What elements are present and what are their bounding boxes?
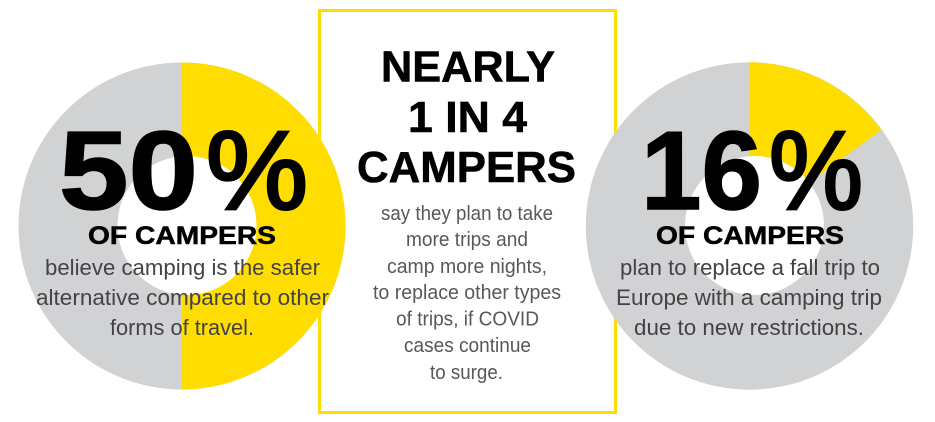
text block: replace fall trip: due to new restrictions. [634,315,864,340]
text block: safer alternative: alternative compared to other [36,285,330,310]
text block: plan to take more trips: to surge. [430,362,503,384]
heading: nearly 1 in 4 campers: NEARLY [381,42,555,92]
panel: 16% of campers [586,62,913,390]
statistic: 16%: % [769,109,863,233]
text block: plan to take more trips [373,203,561,384]
text block: plan to take more trips: to replace other types [373,282,561,304]
heading: nearly 1 in 4 campers: CAMPERS [357,143,576,192]
subheading: of campers: OF CAMPERS [88,222,276,250]
text block: plan to take more trips: say they plan to take [381,203,553,225]
heading: nearly 1 in 4 campers: 1 IN 4 [408,93,528,142]
statistic: 50%: % [206,109,308,233]
panel: 50% of campers [18,62,346,390]
panel border [320,10,616,412]
text block: replace fall trip [616,255,882,340]
panel: nearly 1 in 4 campers [320,10,616,412]
text block: safer alternative: forms of travel. [110,315,254,340]
text block: plan to take more trips: of trips, if COVID [396,308,539,330]
text block: safer alternative: believe camping is the safer [45,255,320,280]
heading: nearly 1 in 4 campers [357,42,576,192]
text block: replace fall trip: Europe with a camping trip [616,285,882,310]
donut chart: 16 percent [586,62,913,390]
subheading: of campers: OF CAMPERS [656,222,844,250]
statistic: 16%: 16 [641,109,762,233]
text block: plan to take more trips: cases continue [404,335,531,357]
statistic: 16% [641,109,863,233]
text block: safer alternative [36,255,330,340]
statistic: 50% [59,109,308,233]
text block: plan to take more trips: more trips and [406,229,528,251]
text block: plan to take more trips: camp more nights, [387,256,547,278]
donut chart: 50 percent [18,62,346,390]
text block: replace fall trip: plan to replace a fall trip to [620,255,880,280]
statistic: 50%: 50 [59,109,198,233]
